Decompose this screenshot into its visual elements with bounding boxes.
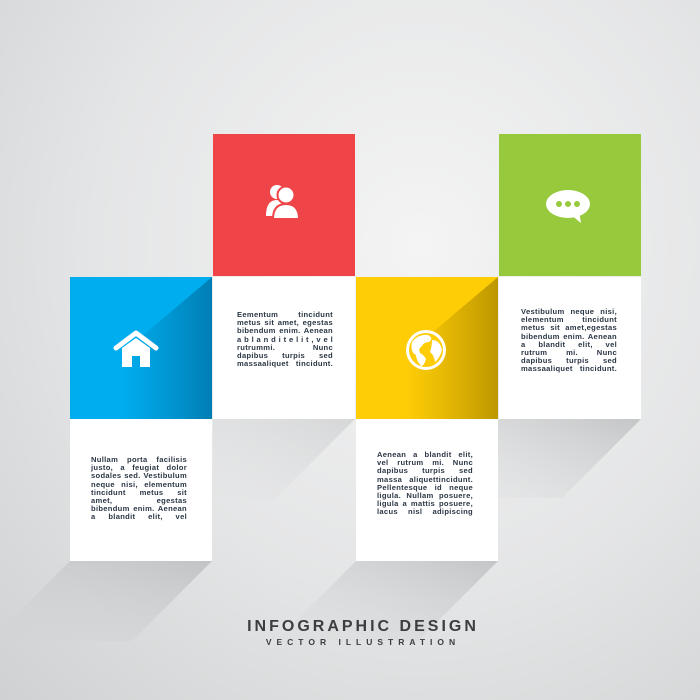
text block yellow: Pellentesque id neque bbox=[377, 483, 473, 492]
text block red: dapibus turpis sed bbox=[237, 351, 333, 360]
text block green: metus sit amet,egestas bbox=[521, 323, 617, 332]
text block blue: amet, egestas bbox=[91, 496, 187, 505]
icon: globe bbox=[406, 330, 446, 370]
text block red bbox=[237, 310, 333, 368]
title: INFOGRAPHIC DESIGN bbox=[247, 618, 479, 635]
text block blue: justo, a feugiat dolor bbox=[91, 463, 187, 472]
panel: green bbox=[499, 134, 641, 276]
text block green: massaaliquet tincidunt. bbox=[521, 364, 617, 373]
panel: white text blue bbox=[70, 419, 212, 561]
text block green: Vestibulum neque nisi, bbox=[521, 307, 617, 316]
text block blue: tincidunt metus sit bbox=[91, 488, 187, 497]
text block yellow: ligula. Nullam posuere, bbox=[377, 491, 473, 500]
text block green: bibendum enim. Aenean bbox=[521, 332, 617, 341]
text block yellow bbox=[377, 450, 473, 516]
text block green bbox=[521, 307, 617, 373]
subtitle: VECTOR ILLUSTRATION bbox=[266, 637, 460, 647]
text block red: rutrummi. Nunc bbox=[237, 343, 333, 352]
icon: people bbox=[266, 185, 298, 218]
text block red: massaaliquet tincidunt. bbox=[237, 359, 333, 368]
panel: blue bbox=[70, 277, 212, 419]
panel: yellow bbox=[356, 277, 498, 419]
text block yellow: lacus nisl adipiscing bbox=[377, 507, 473, 516]
panel: white text green bbox=[499, 277, 641, 419]
panel: white text yellow bbox=[356, 419, 498, 561]
text block red: Eementum tincidunt bbox=[237, 310, 333, 319]
text block yellow: massa aliquettincidunt. bbox=[377, 475, 473, 484]
text block blue bbox=[90, 455, 187, 521]
text block blue: Nullam porta facilisis bbox=[91, 455, 187, 464]
text block yellow: Aenean a blandit elit, bbox=[377, 450, 473, 459]
icon: house bbox=[114, 330, 158, 367]
text block red: a b l a n d i t e l i t , v e l bbox=[237, 335, 333, 344]
text block blue: bibendum enim. Aenean bbox=[91, 504, 187, 513]
text block yellow: ligula a mattis posuere, bbox=[377, 499, 473, 508]
text block green: rutrum mi. Nunc bbox=[521, 348, 617, 357]
text block blue: neque nisi, elementum bbox=[91, 480, 187, 489]
text block blue: a blandit elit, vel bbox=[91, 512, 187, 521]
panel: red bbox=[213, 134, 355, 276]
text block green: dapibus turpis sed bbox=[521, 356, 617, 365]
text block blue: sodales sed. Vestibulum bbox=[91, 471, 187, 480]
text block yellow: vel rutrum mi. Nunc bbox=[377, 458, 473, 467]
panel: white text red bbox=[213, 277, 355, 419]
text block red: metus sit amet, egestas bbox=[237, 318, 333, 327]
text block green: elementum tincidunt bbox=[521, 315, 617, 324]
text block red: bibendum enim. Aenean bbox=[237, 326, 333, 335]
text block yellow: dapibus turpis sed bbox=[377, 466, 473, 475]
text block green: a blandit elit, vel bbox=[521, 340, 617, 349]
icon: chat bubble bbox=[546, 190, 590, 223]
